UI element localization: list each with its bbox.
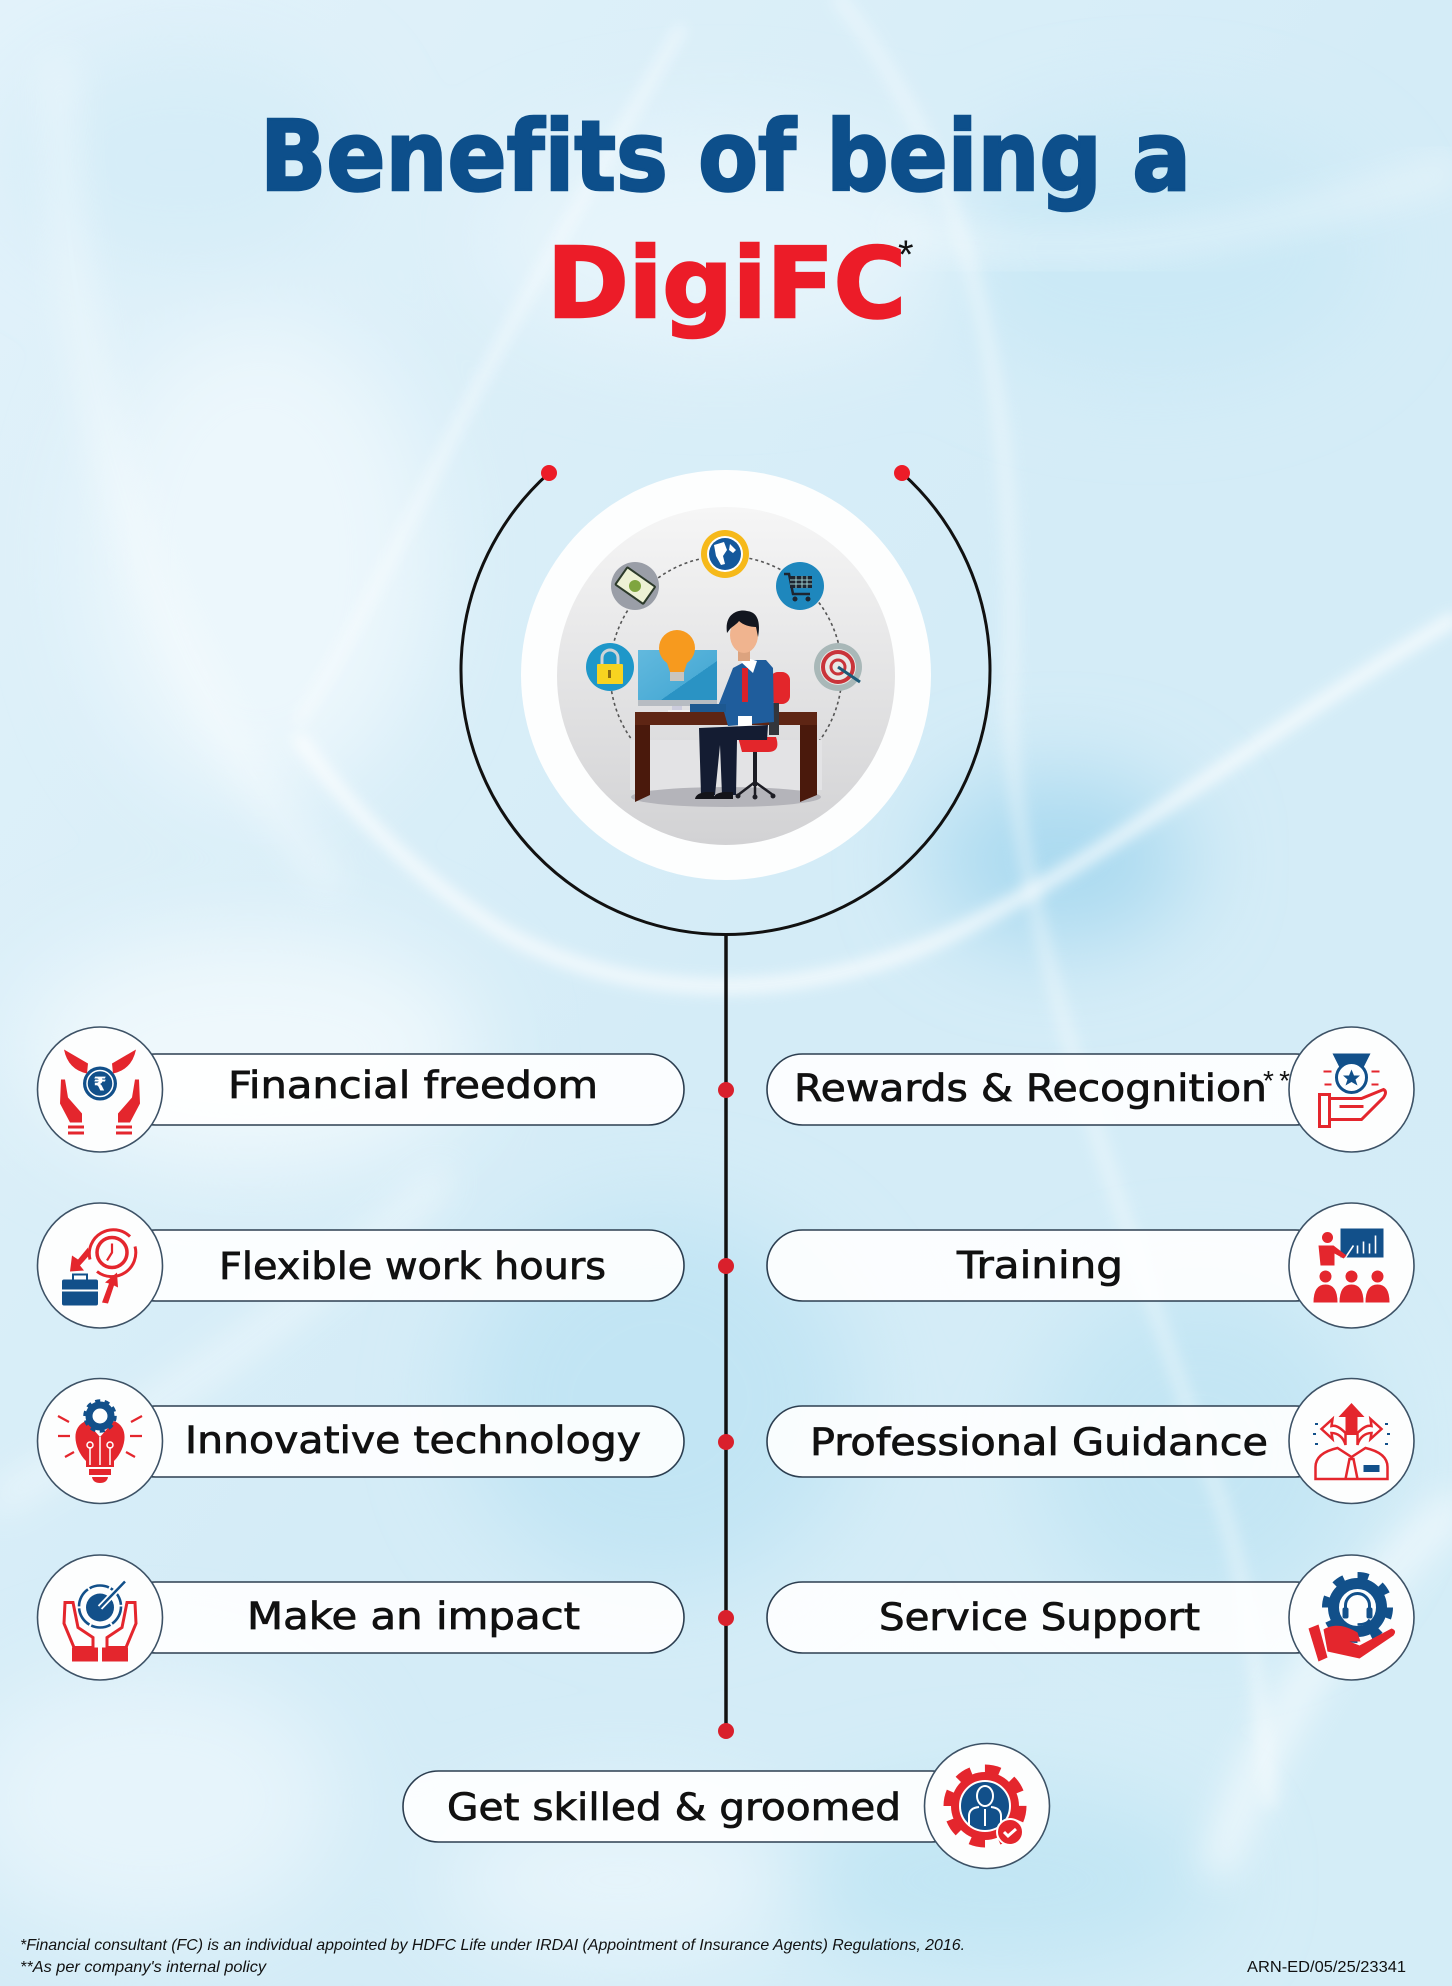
icon: gear with headset and hand (1289, 1555, 1414, 1680)
chair (736, 672, 790, 800)
desk (635, 712, 817, 802)
icon: target in hands (38, 1555, 162, 1680)
pill: Innovative technology (120, 1406, 684, 1477)
panel: Rewards & Recognition: ** (1263, 1065, 1290, 1096)
icon: person with direction arrows (1289, 1378, 1414, 1504)
reference code: ARN-ED/05/25/23341 (1247, 1959, 1406, 1976)
pill: Make an impact (120, 1582, 684, 1653)
panel: Training (767, 1203, 1414, 1328)
icon: gear with person and check (924, 1744, 1050, 1868)
pill: Rewards & Recognition (767, 1054, 1331, 1125)
label: Financial freedom (228, 1064, 598, 1107)
icon: shopping cart (776, 562, 824, 610)
label: Flexible work hours (219, 1245, 606, 1288)
title: DigiFC (547, 227, 906, 340)
label: Training (956, 1244, 1123, 1287)
icon: presenter and audience (1289, 1203, 1414, 1328)
panel: Financial freedom (38, 1027, 684, 1152)
pill: Professional Guidance (767, 1406, 1331, 1477)
central illustration: consultant at desk (521, 470, 931, 880)
icon: clock and briefcase (38, 1203, 162, 1328)
label: Rewards & Recognition (794, 1067, 1267, 1110)
panel: Innovative technology (38, 1378, 684, 1504)
panel: Professional Guidance (767, 1378, 1414, 1504)
panel: Service Support (767, 1555, 1414, 1680)
footnotes: **As per company's internal policy (20, 1959, 267, 1976)
pill: Flexible work hours (120, 1230, 684, 1301)
label: Innovative technology (185, 1419, 641, 1462)
pill: Training (767, 1230, 1331, 1301)
icon: rupee and hands: ₹ (93, 1074, 107, 1096)
pill: Get skilled & groomed (403, 1771, 967, 1842)
icon: rupee and hands (38, 1027, 162, 1152)
label: Professional Guidance (810, 1421, 1268, 1464)
connector: arc and vertical line (461, 465, 990, 1739)
pill: Service Support (767, 1582, 1331, 1653)
icon: target (814, 643, 862, 691)
label: Service Support (879, 1596, 1200, 1639)
panel: Make an impact (38, 1555, 684, 1680)
panel: Get skilled & groomed (403, 1744, 1050, 1868)
icon: medal in hand (1289, 1027, 1414, 1152)
pill: Financial freedom (120, 1054, 684, 1125)
icon: banknote (611, 562, 659, 610)
icon: padlock (586, 643, 634, 691)
panel: Flexible work hours (38, 1203, 684, 1328)
consultant figure (690, 611, 774, 799)
footnotes: *Financial consultant (FC) is an individual appointed by HDFC Life under IRDAI (Appointment of Insurance Agents) Regulations, 2016. (20, 1937, 965, 1954)
title: * (898, 233, 914, 277)
footnotes (20, 1937, 965, 1976)
label: Get skilled & groomed (447, 1786, 901, 1829)
panel: Rewards & Recognition (767, 1027, 1414, 1152)
icon: globe (701, 530, 749, 578)
icon: light bulb with gear (38, 1378, 162, 1504)
monitor with light bulb (638, 630, 717, 714)
title: Benefits of being a (260, 100, 1191, 213)
label: Make an impact (247, 1595, 580, 1638)
title (260, 100, 1191, 340)
